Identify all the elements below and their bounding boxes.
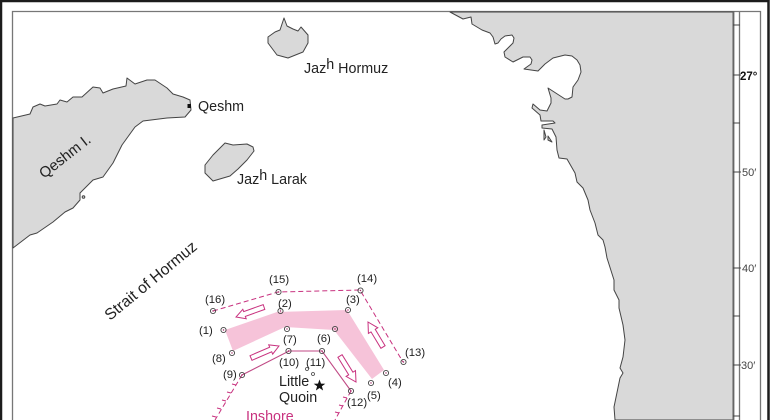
hollow arrow: northbound [368, 322, 385, 348]
waypoint number labels: (12) [347, 397, 367, 409]
waypoint number labels: (13) [405, 347, 425, 359]
place label: Jazh Hormuz: h [326, 57, 334, 73]
waypoint markers [210, 288, 406, 394]
place label: Jazh Larak: Jaz [237, 172, 259, 188]
place label: Qeshm I.: Qeshm I. [36, 131, 94, 182]
waypoint number labels: (4) [388, 377, 402, 389]
waypoint number labels: (7) [283, 334, 297, 346]
hollow arrow: eastbound [250, 345, 279, 360]
waypoint number labels: (8) [212, 353, 226, 365]
icon: star marking Little Quoin [314, 380, 325, 390]
land: Jazh Hormuz island [268, 18, 308, 58]
place label: Jazh Larak: h [259, 168, 267, 184]
dashed outer boundary [213, 290, 403, 362]
waypoint number labels: (15) [269, 274, 289, 286]
latitude labels: 50′ [742, 167, 756, 179]
pink shipping lane band [225, 310, 384, 379]
land: eastern coast [450, 12, 733, 420]
place label: Qeshm town: Qeshm [198, 99, 244, 115]
latitude labels: 30′ [741, 360, 755, 372]
latitude scale [733, 11, 758, 420]
land: small islets off the coast [544, 130, 552, 142]
waypoint number labels: (16) [205, 294, 225, 306]
latitude labels: 27° [740, 71, 758, 83]
water label: Strait of Hormuz: Strait of Hormuz [102, 238, 201, 324]
hollow arrow: southbound [338, 355, 356, 382]
land: Qeshm Island [13, 78, 191, 248]
solid inner boundary [242, 351, 351, 391]
waypoint number labels: (11) [306, 357, 325, 369]
islet near Qeshm [82, 196, 85, 198]
place label: Jazh Hormuz: Jaz [304, 61, 326, 77]
inshore traffic zone boundary, left [212, 375, 242, 420]
place label: Jazh Larak: Larak [267, 172, 308, 188]
land: Jazh Larak island [205, 143, 254, 181]
small rocks near Little Quoin [306, 368, 314, 376]
place label: Jazh Hormuz: Hormuz [334, 61, 388, 77]
waypoint number labels: (9) [223, 369, 237, 381]
waypoint number labels: (3) [346, 294, 360, 306]
hollow arrow: westbound [236, 305, 265, 319]
latitude labels: 40′ [742, 263, 756, 275]
waypoint number labels: (5) [367, 390, 381, 402]
waypoint number labels: (1) [199, 325, 213, 337]
waypoint number labels: (14) [357, 273, 377, 285]
latitude labels [740, 71, 758, 372]
waypoint number labels: (2) [278, 298, 292, 310]
waypoint number labels [199, 273, 425, 409]
place label: Little Quoin: Quoin [279, 390, 317, 406]
place label: Little Quoin: Little [279, 374, 309, 390]
waypoint number labels: (6) [317, 333, 331, 345]
inshore traffic zone boundary, right [335, 391, 351, 420]
waypoint number labels: (10) [279, 357, 299, 369]
